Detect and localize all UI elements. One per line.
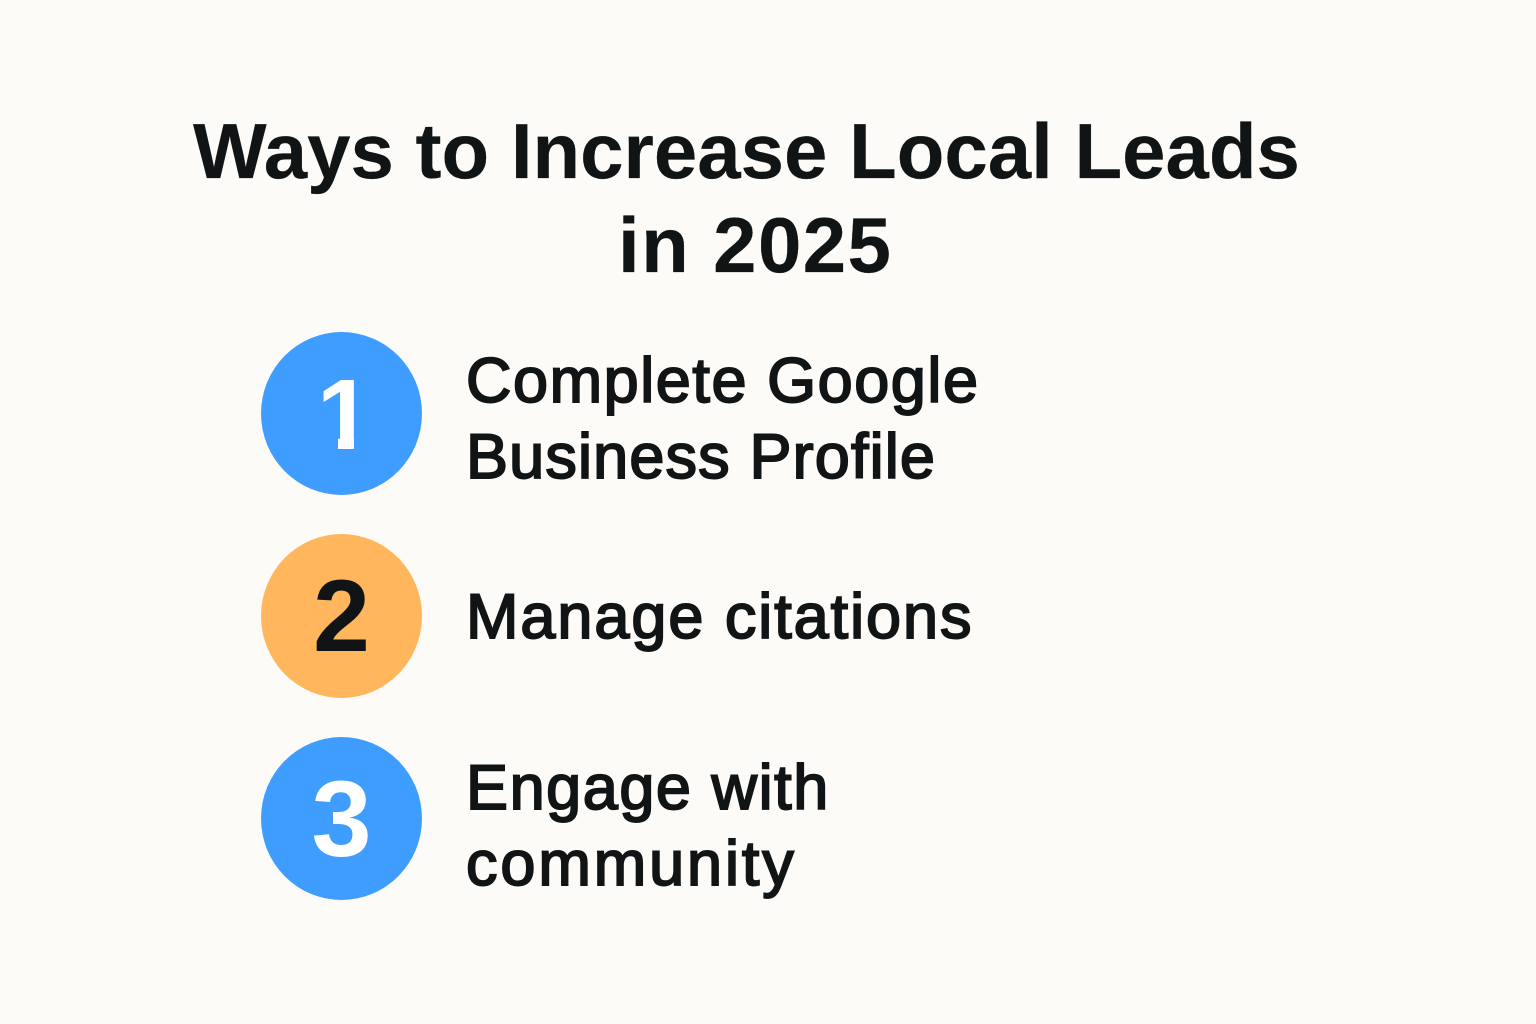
step 3 badge bbox=[261, 737, 422, 900]
step 3 text bbox=[466, 753, 830, 899]
step 2 text: Manage citations bbox=[466, 582, 973, 652]
step 1 badge: 1 bbox=[317, 359, 372, 471]
step 2 badge bbox=[261, 534, 422, 698]
step 1 badge bbox=[261, 332, 422, 495]
title: Ways to Increase Local Leads bbox=[193, 107, 1300, 195]
step 3 text: community bbox=[466, 829, 797, 899]
step 3 text: Engage with bbox=[466, 753, 830, 823]
step 1 text: Business Profile bbox=[466, 422, 936, 492]
step 2 badge: 2 bbox=[313, 559, 370, 673]
step 3 badge: 3 bbox=[311, 758, 372, 879]
title: in 2025 bbox=[618, 201, 892, 289]
step 1 text bbox=[466, 346, 980, 492]
step 1 text: Complete Google bbox=[466, 346, 980, 416]
title bbox=[193, 107, 1300, 289]
